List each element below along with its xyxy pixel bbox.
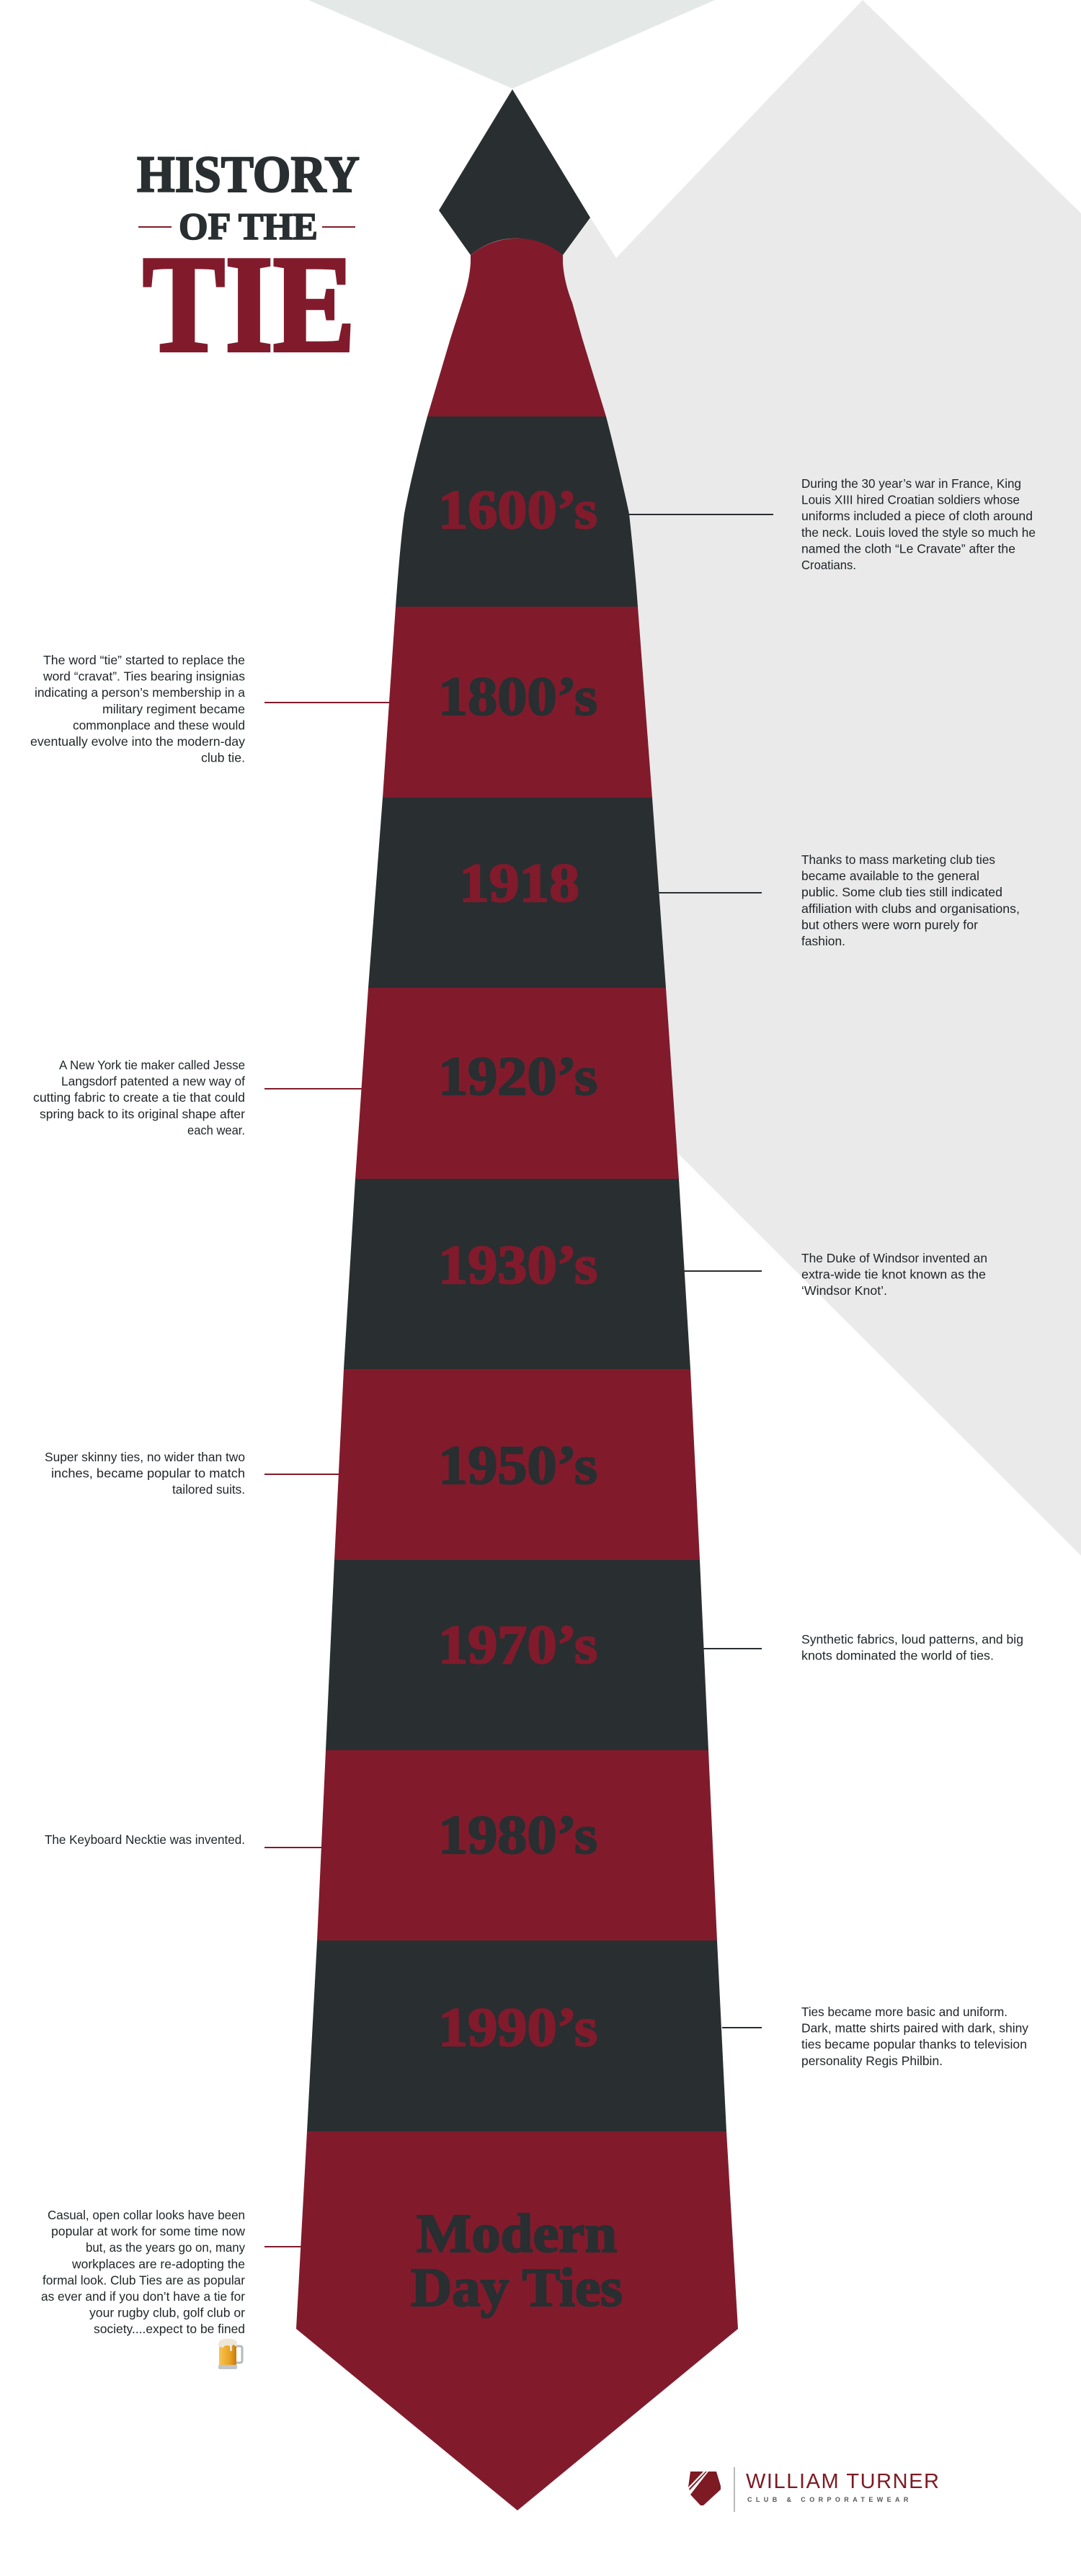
text 1990s: ties became popular thanks to television (801, 2037, 1027, 2051)
label 1600s: 1600’s (438, 480, 597, 540)
logo tagline: CLUB & CORPORATEWEAR (747, 2496, 912, 2503)
text 1600s: named the cloth “Le Cravate” after the (801, 541, 1015, 556)
text 1800s: eventually evolve into the modern-day (30, 734, 245, 749)
text 1918: public. Some club ties still indicated (801, 885, 1002, 899)
title: TIE: TIE (143, 228, 355, 380)
text 1600s: uniforms included a piece of cloth around (801, 509, 1033, 523)
connector 1950s (264, 1474, 339, 1475)
text modern day: workplaces are re-adopting the (71, 2257, 245, 2271)
text 1990s: Ties became more basic and uniform. (801, 2005, 1007, 2019)
text 1930s: The Duke of Windsor invented an (801, 1251, 987, 1265)
band 1950s (334, 1369, 700, 1560)
label modern day ties: Modern (417, 2203, 617, 2264)
label 1950s: 1950’s (438, 1435, 597, 1496)
text modern day (41, 2208, 245, 2336)
text 1600s (801, 476, 1036, 572)
label 1800s: 1800’s (438, 667, 597, 727)
connector 1920s (264, 1088, 362, 1089)
connector 1980s (264, 1847, 322, 1848)
text 1600s: During the 30 year’s war in France, King (801, 476, 1021, 491)
logo (688, 2467, 939, 2512)
label 1990s: 1990’s (438, 1997, 597, 2058)
text modern day: society....expect to be fined (94, 2322, 245, 2336)
label modern day ties: Day Ties (411, 2258, 623, 2318)
text 1920s: each wear. (187, 1123, 245, 1137)
text modern day: Casual, open collar looks have been (48, 2208, 245, 2222)
label 1930s: 1930’s (438, 1235, 597, 1296)
band 1920s (355, 988, 679, 1179)
text 1800s: military regiment became (102, 702, 245, 716)
band 1800s (383, 607, 652, 798)
text 1918: became available to the general (801, 869, 979, 883)
text 1918: but others were worn purely for (801, 917, 978, 932)
text 1800s: The word “tie” started to replace the (43, 653, 245, 667)
text 1918: Thanks to mass marketing club ties (801, 852, 995, 867)
text 1800s: word “cravat”. Ties bearing insignias (43, 669, 245, 684)
text 1950s: inches, became popular to match (51, 1466, 245, 1481)
text 1600s: the neck. Louis loved the style so much he (801, 525, 1036, 540)
title: HISTORY: HISTORY (137, 146, 360, 203)
connector 1800s (264, 702, 391, 703)
shirt collar shadow (308, 0, 715, 89)
title rule left (138, 226, 172, 228)
label 1918: 1918 (459, 853, 579, 914)
text 1800s (30, 653, 245, 765)
band 1980s (317, 1750, 717, 1940)
text 1800s: indicating a person’s membership in a (35, 685, 245, 700)
text 1970s (801, 1632, 1023, 1663)
text 1918 (801, 852, 1020, 948)
connector 1600s (626, 514, 773, 515)
logo name: WILLIAM TURNER (746, 2470, 939, 2493)
band 1990s (307, 1940, 726, 2131)
connector modern (264, 2246, 302, 2247)
text 1930s (801, 1251, 987, 1298)
label 1980s: 1980’s (438, 1805, 597, 1866)
text 1970s: knots dominated the world of ties. (801, 1649, 994, 1663)
text 1990s (801, 2005, 1028, 2068)
connector 1990s (722, 2027, 762, 2028)
text modern day: as ever and if you don’t have a tie for (41, 2289, 245, 2304)
tie body: red base (427, 255, 606, 416)
text 1920s: A New York tie maker called Jesse (59, 1058, 245, 1072)
logo shield (688, 2472, 721, 2505)
text 1990s: Dark, matte shirts paired with dark, shiny (801, 2021, 1028, 2036)
text 1918: fashion. (801, 934, 845, 948)
text 1600s: Louis XIII hired Croatian soldiers whose (801, 493, 1020, 507)
connector 1930s (683, 1270, 762, 1272)
text 1920s (33, 1058, 245, 1137)
band 1918 (368, 798, 666, 988)
tie knot red fold (471, 239, 563, 261)
tie (296, 89, 738, 2510)
text 1918: affiliation with clubs and organisations, (801, 901, 1020, 916)
text 1930s: ‘Windsor Knot’. (801, 1283, 887, 1298)
text 1970s: Synthetic fabrics, loud patterns, and big (801, 1632, 1023, 1646)
text 1920s: Langsdorf patented a new way of (61, 1074, 245, 1089)
band 1970s (326, 1560, 708, 1750)
text 1800s: commonplace and these would (73, 718, 245, 732)
text 1950s: tailored suits. (172, 1482, 245, 1497)
tie knot (439, 89, 590, 255)
title rule right (322, 226, 355, 228)
text 1980s: The Keyboard Necktie was invented. (45, 1832, 245, 1847)
text 1990s: personality Regis Philbin. (801, 2054, 943, 2068)
title (137, 146, 360, 380)
title: OF THE: OF THE (179, 206, 318, 248)
text 1600s: Croatians. (801, 558, 856, 572)
text modern day: your rugby club, golf club or (89, 2306, 245, 2320)
band 1600s (396, 416, 638, 607)
label 1970s: 1970’s (438, 1615, 597, 1675)
icon: beer mug (218, 2339, 242, 2369)
connector 1970s (703, 1648, 762, 1649)
label 1920s: 1920’s (438, 1046, 597, 1107)
band modern day with tip (296, 2131, 738, 2510)
text modern day: popular at work for some time now (51, 2224, 245, 2239)
text modern day: but, as the years go on, many (86, 2240, 245, 2255)
text 1920s: cutting fabric to create a tie that could (33, 1090, 245, 1105)
shirt grey shadow panel (504, 0, 1081, 1556)
text 1950s (45, 1450, 245, 1497)
text 1920s: spring back to its original shape after (40, 1107, 245, 1121)
text 1800s: club tie. (201, 751, 245, 765)
band 1930s (344, 1179, 690, 1369)
label modern day ties (411, 2203, 623, 2318)
text 1930s: extra-wide tie knot known as the (801, 1267, 986, 1282)
text 1950s: Super skinny ties, no wider than two (45, 1450, 245, 1464)
connector 1918 (659, 892, 762, 893)
logo divider (734, 2467, 735, 2512)
text modern day: formal look. Club Ties are as popular (43, 2273, 245, 2287)
